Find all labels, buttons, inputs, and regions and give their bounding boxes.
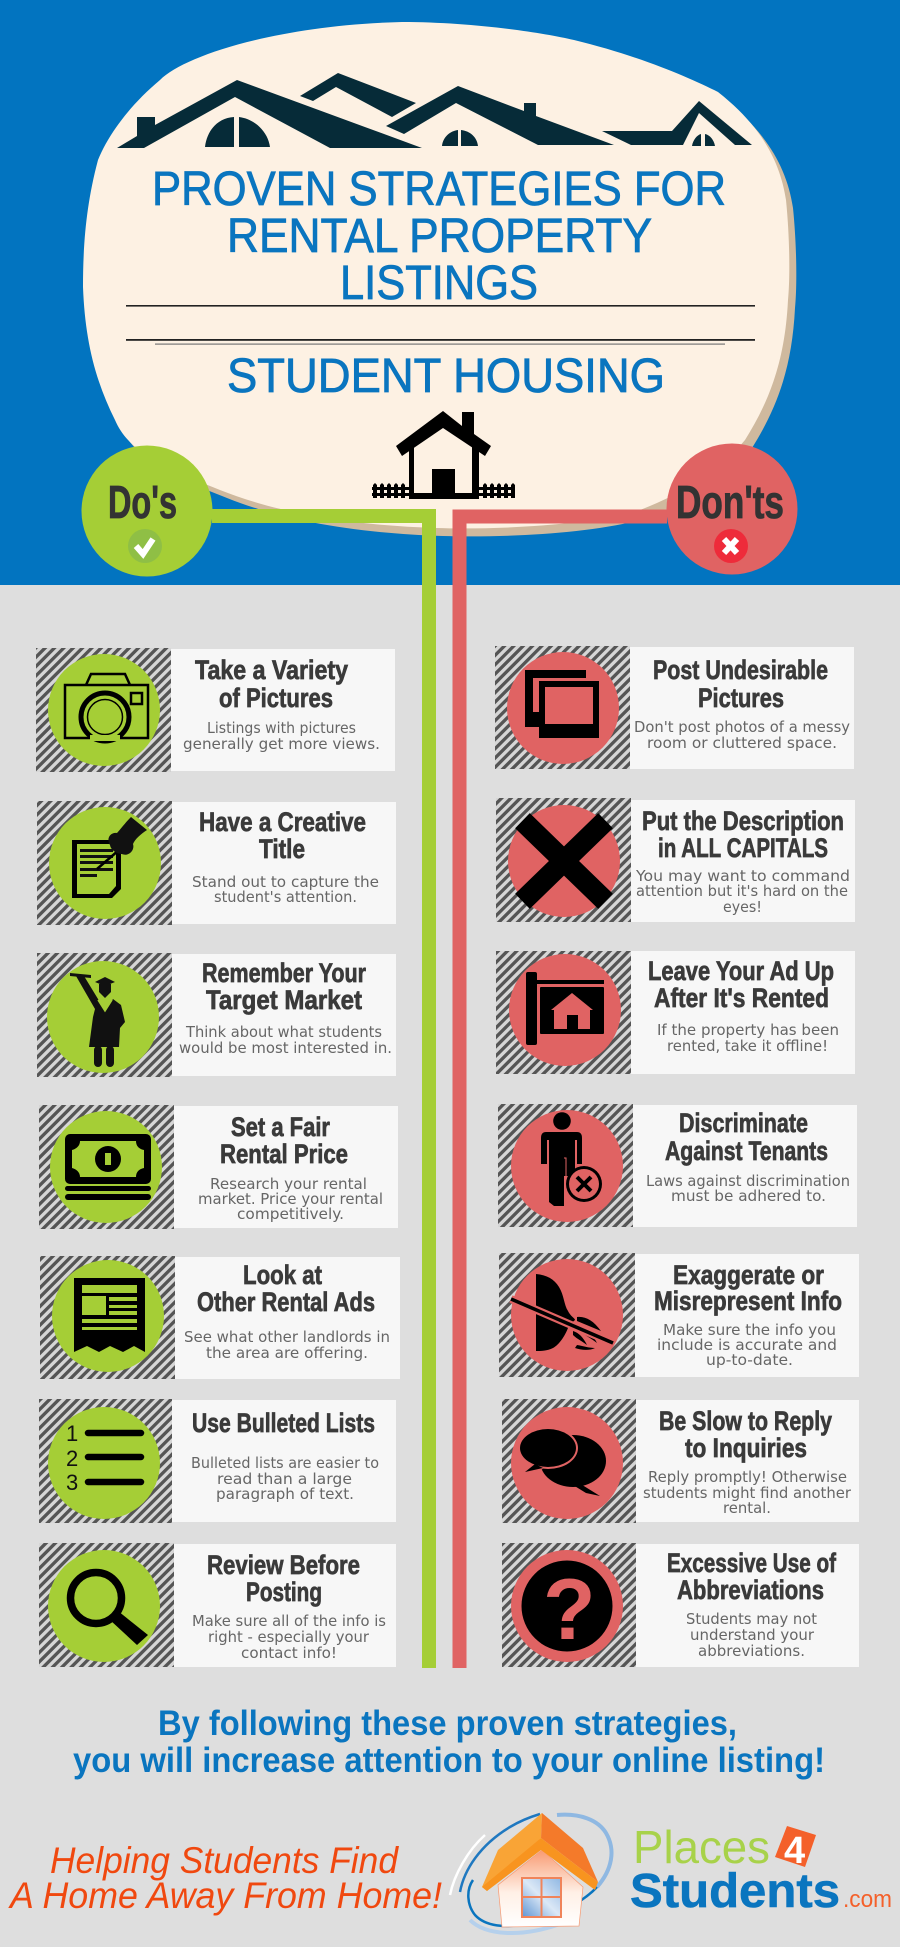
text: body: eyes!	[723, 898, 762, 916]
text: title: Misrepresent Info	[654, 1286, 842, 1316]
icon: photos	[525, 670, 599, 738]
icon: question mark: ?	[543, 1562, 596, 1658]
title: PROVEN STRATEGIES FOR	[152, 163, 726, 216]
icon: 4 badge	[775, 1826, 816, 1872]
panel: excessive use of abbreviations	[502, 1543, 859, 1667]
text: title	[197, 1260, 375, 1317]
text: title: Target Market	[206, 985, 362, 1015]
text: body: Don't post photos of a messy	[634, 718, 850, 736]
text: title: Rental Price	[220, 1139, 348, 1169]
panel: discriminate against tenants	[498, 1104, 857, 1227]
text: body: abbreviations.	[698, 1642, 805, 1660]
text: title: Put the Description	[642, 806, 844, 836]
text: body: contact info!	[241, 1644, 337, 1662]
icon: pinned note	[72, 817, 147, 898]
text: title: Posting	[246, 1577, 322, 1607]
text: body: Stand out to capture the	[192, 873, 379, 891]
text: body: Think about what students	[185, 1023, 382, 1041]
text: title	[648, 956, 834, 1013]
panel: take a variety of pictures	[36, 648, 395, 772]
text: body: Reply promptly! Otherwise	[648, 1468, 847, 1486]
text: title: Remember Your	[202, 958, 366, 988]
text: body: Research your rental	[210, 1175, 367, 1193]
text: body	[646, 1172, 850, 1205]
text: body: students might find another	[643, 1484, 852, 1502]
text: title: Take a Variety	[195, 655, 348, 685]
text: body: room or cluttered space.	[647, 734, 837, 752]
text: body	[643, 1468, 852, 1517]
text: body: rented, take it offline!	[667, 1037, 828, 1055]
panel: look at other rental ads	[40, 1256, 400, 1379]
text: body: up-to-date.	[706, 1351, 793, 1369]
text: title: to Inquiries	[685, 1433, 807, 1463]
text: title: Title	[259, 834, 305, 864]
icon: muted speaking face	[511, 1274, 613, 1351]
text: title	[665, 1108, 828, 1166]
text: title: After It's Rented	[654, 983, 829, 1013]
text: title: Abbreviations	[677, 1575, 824, 1605]
title	[152, 163, 726, 310]
text: title	[195, 655, 348, 713]
panel: put the description in all capitals	[496, 798, 855, 922]
text: body: attention but it's hard on the	[636, 882, 848, 900]
text: body	[657, 1321, 837, 1369]
text: title: Excessive Use of	[667, 1548, 837, 1578]
text: body: right - especially your	[208, 1628, 370, 1646]
text: title	[659, 1406, 832, 1463]
icon: rooftops	[117, 73, 752, 148]
panel: set a fair rental price	[39, 1105, 398, 1229]
logo wordmark	[630, 1821, 892, 1918]
icon: person with x	[541, 1112, 602, 1206]
text: body: Make sure the info you	[663, 1321, 836, 1339]
text: title: Use Bulleted Lists	[192, 1408, 375, 1438]
icon: numbered list	[66, 1421, 141, 1495]
logo wordmark: Students	[630, 1865, 840, 1918]
panel: review before posting	[39, 1543, 396, 1667]
text: body	[634, 718, 850, 752]
panel: exaggerate or misrepresent info	[499, 1253, 859, 1377]
text: title	[202, 958, 366, 1015]
panel: use bulleted lists	[39, 1399, 396, 1523]
badge: don'ts	[666, 444, 798, 574]
text: body	[191, 1454, 379, 1503]
panel: have a creative title	[37, 801, 396, 925]
icon: graduate	[70, 973, 125, 1067]
text: body: See what other landlords in	[184, 1328, 390, 1346]
badge: do's: Do's	[108, 476, 177, 528]
text: title: of Pictures	[219, 683, 333, 713]
text: title: Against Tenants	[665, 1136, 828, 1166]
text: title	[207, 1550, 360, 1607]
logo wordmark: Places	[633, 1821, 770, 1873]
text: body: would be most interested in.	[179, 1039, 392, 1057]
text: title: Pictures	[698, 683, 784, 713]
text: title: Post Undesirable	[653, 655, 828, 685]
text: body: understand your	[690, 1626, 815, 1644]
closing statement	[73, 1704, 825, 1780]
text: body: student's attention.	[214, 888, 357, 906]
text: body: Listings with pictures	[207, 719, 356, 737]
text: body	[179, 1023, 392, 1057]
text: body: Bulleted lists are easier to	[191, 1454, 379, 1472]
badge: do's	[82, 446, 212, 576]
connector: green do's line	[212, 516, 429, 1668]
icon: rental sign	[526, 972, 604, 1045]
icon: question mark	[522, 1560, 612, 1658]
title: RENTAL PROPERTY	[227, 210, 652, 263]
text: title	[220, 1112, 348, 1169]
text: title: Discriminate	[679, 1108, 808, 1138]
text: title	[654, 1260, 842, 1316]
house wall	[498, 1850, 583, 1927]
header blob	[83, 22, 796, 536]
panel: remember your target market	[37, 953, 396, 1077]
closing statement: you will increase attention to your online listing!	[73, 1741, 825, 1780]
tagline	[8, 1840, 442, 1916]
subtitle: STUDENT HOUSING	[227, 350, 665, 403]
text: title: Leave Your Ad Up	[648, 956, 834, 986]
text: title: Have a Creative	[199, 807, 366, 837]
text: body: Laws against discrimination	[646, 1172, 850, 1190]
text: body: Students may not	[686, 1610, 817, 1628]
connector: red don'ts line	[460, 516, 667, 1668]
icon: cross mark	[714, 529, 748, 563]
icon: magnifying glass	[70, 1572, 148, 1645]
text: title: Be Slow to Reply	[659, 1406, 832, 1436]
text: title: Review Before	[207, 1550, 360, 1580]
text: body: rental.	[723, 1499, 771, 1517]
text: body: market. Price your rental	[198, 1190, 383, 1208]
panel: leave your ad up after it's rented	[496, 951, 855, 1074]
icon: newspaper	[74, 1278, 145, 1352]
text: body	[686, 1610, 817, 1660]
icon: camera	[65, 674, 148, 741]
window	[522, 1878, 561, 1917]
icon: 4 badge: 4	[784, 1830, 805, 1872]
header band: blue	[0, 0, 900, 585]
text: body: If the property has been	[657, 1021, 839, 1039]
text: body	[183, 719, 380, 753]
blob shadow	[90, 30, 796, 536]
text: title	[642, 806, 844, 863]
text: body	[192, 1612, 386, 1662]
panel: post undesirable pictures	[495, 646, 854, 769]
text: body	[635, 867, 850, 916]
icon: stack of money	[65, 1134, 151, 1200]
icon: numbered list: 2	[66, 1446, 78, 1471]
text: body: the area are offering.	[206, 1344, 368, 1362]
badge: don'ts: Don'ts	[676, 476, 784, 528]
text: body: Make sure all of the info is	[192, 1612, 386, 1630]
title: LISTINGS	[340, 257, 538, 310]
icon: numbered list: 1	[66, 1421, 78, 1446]
panel: be slow to reply to inquiries	[502, 1399, 859, 1523]
text: body	[184, 1328, 390, 1362]
text: body: include is accurate and	[657, 1336, 837, 1354]
tagline: A Home Away From Home!	[8, 1875, 442, 1916]
roof	[482, 1813, 598, 1891]
icon: big x	[530, 828, 598, 894]
text: title: Other Rental Ads	[197, 1287, 375, 1317]
text: title: Look at	[243, 1260, 322, 1290]
text: body: You may want to command	[635, 867, 850, 885]
text: body: paragraph of text.	[216, 1485, 354, 1503]
text: title	[199, 807, 366, 864]
text: body: read than a large	[217, 1470, 352, 1488]
icon: check mark	[128, 529, 162, 563]
text: title: in ALL CAPITALS	[658, 833, 828, 863]
text: body	[657, 1021, 839, 1055]
text: title: Set a Fair	[231, 1112, 330, 1142]
text: body: must be adhered to.	[671, 1187, 826, 1205]
tagline: Helping Students Find	[50, 1840, 399, 1881]
text: body	[192, 873, 379, 906]
logo wordmark: .com	[843, 1886, 892, 1913]
logo: house with swirl	[450, 1813, 612, 1933]
blob face	[83, 22, 789, 528]
text: title	[653, 655, 828, 713]
text: body: generally get more views.	[183, 735, 380, 753]
text: body	[198, 1175, 383, 1223]
text: body: competitively.	[237, 1205, 344, 1223]
icon: house with fence	[372, 411, 515, 499]
icon: numbered list: 3	[66, 1470, 78, 1495]
icon: chat bubbles	[518, 1427, 606, 1496]
text: title	[667, 1548, 837, 1605]
closing statement: By following these proven strategies,	[158, 1704, 737, 1743]
text: title: Exaggerate or	[673, 1260, 824, 1290]
